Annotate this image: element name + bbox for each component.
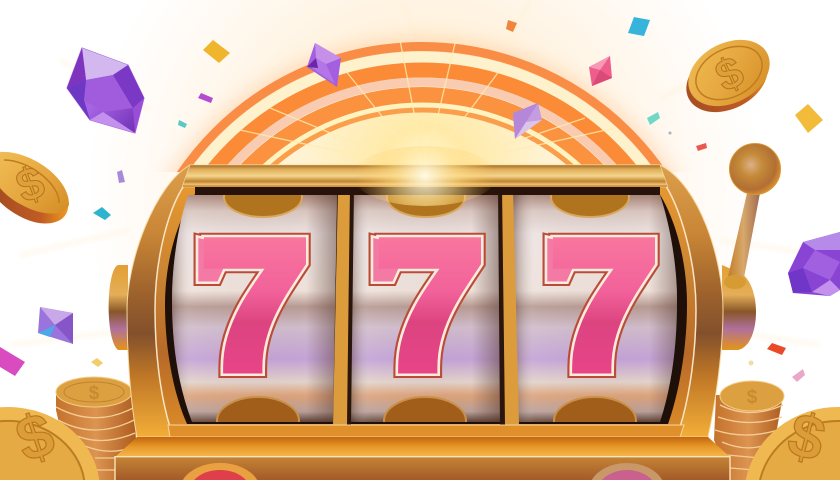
coin: top right: [675, 27, 781, 125]
seven 1: 7: [201, 203, 309, 407]
arc light beams: [240, 35, 615, 154]
seven 2: 7: [376, 203, 484, 407]
pink button: [592, 463, 662, 480]
top bar: [182, 165, 668, 195]
coin: bottom right: [746, 400, 840, 480]
coin stack: right: $: [747, 387, 758, 408]
reel 2: [351, 195, 500, 422]
seven 2: 7: [376, 203, 484, 407]
gem: large purple: [67, 48, 144, 133]
right side knob and lever: [722, 144, 780, 350]
rainbow arcs: [162, 30, 682, 172]
coin: bottom right: $: [781, 400, 832, 475]
reel 3: [513, 195, 677, 422]
seven 3: 7: [550, 203, 658, 407]
coin: bottom left: $: [8, 399, 62, 476]
coin: top right: $: [708, 47, 751, 102]
coin stack: right: [714, 381, 784, 480]
gem: lavender: [513, 103, 542, 139]
reel 1: [172, 195, 337, 422]
coin stack: left: $: [89, 383, 100, 404]
inner ring: [155, 180, 696, 427]
gem: small left: [38, 307, 73, 344]
seven 1: 7: [201, 203, 309, 407]
dark recess: [165, 187, 687, 424]
gem: right purple: [788, 232, 840, 296]
coin: bottom left: [0, 399, 99, 480]
confetti pieces: [0, 17, 823, 382]
coin: left: $: [9, 155, 51, 213]
seven 1: 7: [201, 203, 309, 407]
seven 3: 7: [550, 203, 658, 407]
coin: left: [0, 152, 69, 223]
machine body: [127, 165, 723, 437]
top flare: [353, 146, 497, 206]
reel dividers: [333, 187, 519, 425]
light rays: [10, 0, 820, 345]
left side knob: [109, 265, 128, 350]
bottom frame and shelf: [115, 425, 730, 480]
arc interior glow: [312, 112, 538, 164]
red button: [183, 463, 257, 480]
gem: pink: [589, 56, 612, 86]
gem: small top purple: [307, 43, 341, 87]
seven 3: 7: [550, 203, 658, 407]
coin stack: left: [56, 377, 136, 480]
seven 2: 7: [376, 203, 484, 407]
